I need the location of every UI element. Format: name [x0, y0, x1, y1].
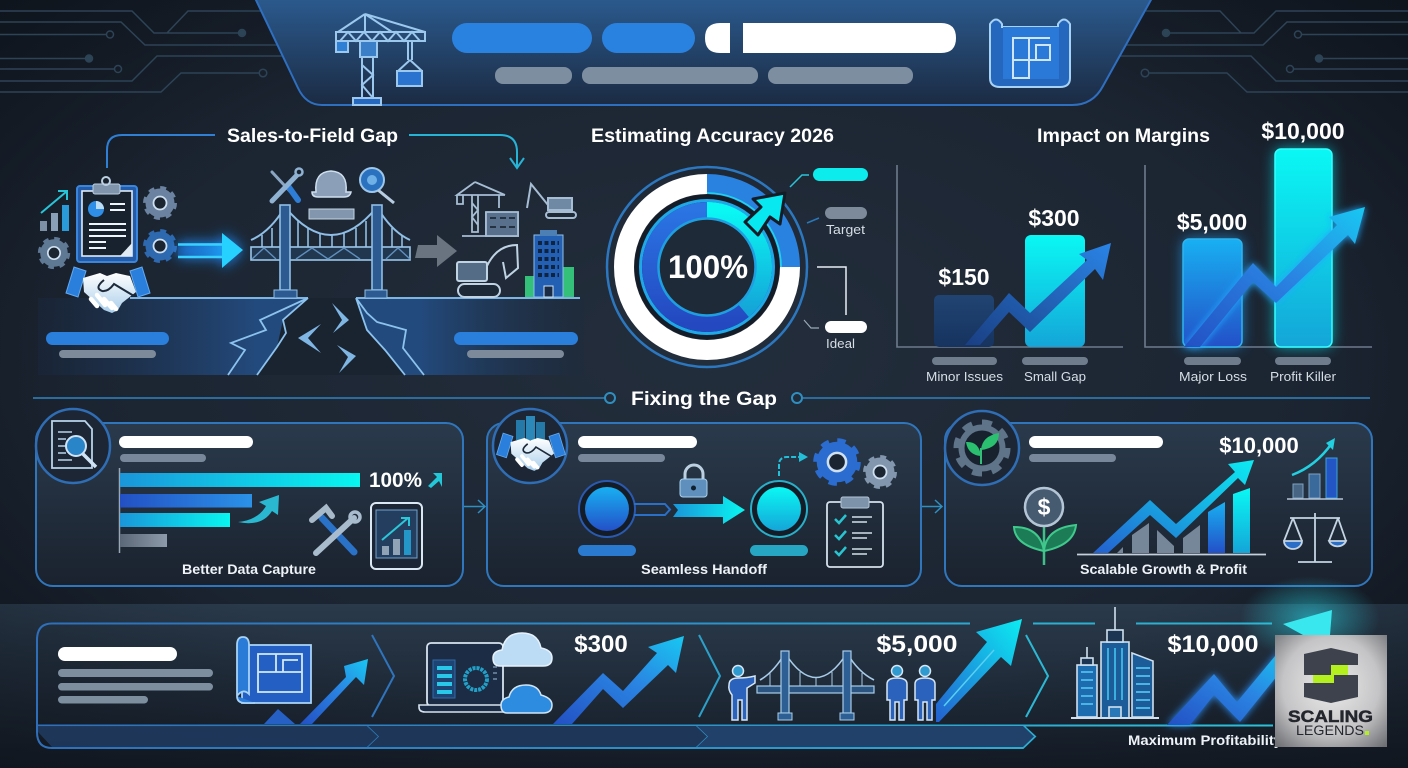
icon: blueprint: [237, 637, 311, 703]
subtitle pill: [1029, 454, 1116, 462]
header title redacted pill: white long: [743, 23, 956, 53]
icon: left gear: [40, 239, 68, 267]
bar chart: large costs: [1145, 118, 1372, 384]
bar chart: small costs: [897, 165, 1123, 384]
title pill: [58, 647, 177, 661]
timeline segment 2: [368, 726, 707, 747]
icon: lock: [680, 465, 707, 497]
logo wordmark: LEGENDS: [1296, 723, 1364, 738]
icon: tower crane: [336, 14, 425, 105]
circuit line decoration right: [1110, 11, 1408, 92]
heading: Fixing the Gap: Fixing the Gap: [631, 389, 777, 410]
heading: Fixing the Gap: [33, 389, 1370, 410]
icon: office building: [525, 230, 574, 297]
arrow: panel 2 to 3: [922, 500, 942, 513]
legend: target: Target: [826, 222, 865, 237]
value: $300: $300: [574, 631, 628, 658]
roadmap timeline bar: [38, 726, 378, 747]
icon: tablet chart: [371, 503, 422, 569]
chevron separators: [372, 635, 1048, 717]
subtitle pill: [578, 454, 665, 462]
bar chart: small costs: Minor Issues: [926, 369, 1004, 384]
header title redacted pill: blue 1: [452, 23, 592, 53]
logo mark: [1304, 648, 1358, 703]
arrow: small up right: [428, 473, 442, 488]
panel: roadmap: [37, 576, 1380, 748]
icon: small bar chart: [40, 191, 69, 231]
icon: bridge and workers: [729, 651, 935, 720]
icon: money plant: [1014, 488, 1076, 565]
header subtitle pills: [495, 67, 913, 84]
icon: small chart: [1287, 438, 1343, 499]
bar chart: large costs: Profit Killer: [1270, 369, 1337, 384]
icon: handshake with buildings: [493, 409, 567, 483]
panel: estimating accuracy: [591, 126, 868, 367]
icon: gear with plant: [945, 411, 1019, 485]
heading: Estimating Accuracy 2026: Estimating Accuracy 2026: [591, 126, 834, 147]
caption: Maximum Profitability: [1128, 732, 1282, 748]
icon: top gear: [146, 188, 174, 218]
icon: hammer and wrench: [312, 508, 360, 553]
icon: document magnifier: [36, 409, 110, 483]
arrow: step 3: [936, 619, 1022, 722]
panel: better data capture: [36, 409, 463, 586]
legend: ideal: [804, 267, 867, 351]
timeline segment 3: [697, 726, 1034, 747]
logo wordmark: SCALING: [1288, 708, 1373, 726]
legend: target: [807, 207, 867, 237]
heading: Sales-to-Field Gap: Sales-to-Field Gap: [227, 126, 398, 147]
icon: tape measure: [360, 168, 394, 203]
icon: blue gear: [146, 232, 174, 260]
bar chart: large costs: $5,000: [1177, 209, 1247, 235]
icon: excavator bottom: [457, 245, 518, 297]
icon: skyscrapers: [1071, 607, 1159, 718]
caption: Better Data Capture: [182, 561, 316, 577]
heading: Impact on Margins: Impact on Margins: [1037, 126, 1210, 147]
header banner: [255, 0, 1152, 105]
title pill: [578, 436, 697, 448]
legend: ideal: Ideal: [826, 336, 855, 351]
caption: Scalable Growth & Profit: [1080, 561, 1247, 577]
bar chart: large costs: Major Loss: [1179, 369, 1248, 384]
bar chart: large costs: $10,000: [1261, 118, 1345, 144]
roadmap frame: [37, 624, 1273, 748]
panel: seamless handoff: [487, 409, 921, 586]
icon: laptop and clouds: [419, 633, 552, 713]
node: field: [751, 481, 807, 537]
icon: clipboard report: [77, 177, 137, 262]
panel: impact on margins: [897, 118, 1372, 384]
text placeholder pills: [58, 669, 213, 704]
icon: blueprint: [990, 20, 1070, 87]
logo: Scaling Legends: [1275, 635, 1387, 747]
value: 100%: 100%: [369, 468, 422, 492]
arrow: glowing blue: [178, 233, 243, 268]
caption: Seamless Handoff: [641, 561, 767, 577]
arrow: handoff: [673, 496, 745, 524]
arrow: step 4: [1167, 576, 1380, 725]
icon: excavator top: [527, 184, 576, 218]
icon: blue gear: [817, 442, 857, 482]
worker 2: [887, 666, 907, 720]
left caption pills: [46, 332, 169, 358]
arrow on donut: [745, 193, 785, 235]
arrow: step 1: [264, 659, 368, 724]
node: sales: [579, 481, 670, 537]
donut value: 100%: [668, 249, 748, 285]
icon: grey gear: [866, 458, 894, 486]
title pill: [119, 436, 253, 448]
chart: growth: [1077, 460, 1266, 554]
panel: sales-to-field gap: [38, 126, 584, 375]
logo wordmark: [1288, 708, 1373, 738]
bar chart: data capture: [120, 468, 360, 553]
arrow: dashed to gears: [779, 452, 808, 476]
worker 3: [915, 666, 935, 720]
bar chart: small costs: Small Gap: [1024, 369, 1086, 384]
arrow: panel 1 to 2: [464, 500, 485, 513]
circuit line decoration left: [0, 11, 298, 92]
icon: handshake: [66, 267, 150, 313]
legend: target pill cyan: [790, 168, 868, 187]
icon: crane and building: [457, 182, 519, 236]
icon: suspension bridge: [251, 205, 410, 298]
icon: money plant: $: [1038, 494, 1051, 520]
arrow: grey: [415, 235, 457, 267]
value: $10,000: $10,000: [1168, 631, 1258, 658]
icon: hard hat: [312, 171, 351, 197]
arrow: step 2: [553, 636, 684, 724]
arrow: curved: [238, 495, 279, 523]
right caption pills: [454, 332, 578, 358]
subtitle pill: [120, 454, 206, 462]
ground with chasm: [38, 298, 584, 375]
donut chart: [607, 167, 807, 367]
worker 1: [729, 666, 755, 720]
bar chart: small costs: $150: [938, 264, 990, 290]
icon: ruler: [309, 209, 354, 219]
connector: left bracket: [107, 135, 215, 168]
title pill: [1029, 436, 1163, 448]
value: $10,000: $10,000: [1219, 433, 1299, 458]
header title redacted pill: white short: [705, 23, 730, 53]
icon: wrench and screwdriver: [272, 168, 302, 201]
value: $5,000: $5,000: [876, 631, 958, 658]
arrow: connector to right: [409, 135, 524, 168]
bottom background band: [0, 604, 1408, 768]
panel: scalable growth: [945, 411, 1372, 586]
header title redacted pill: blue 2: [602, 23, 695, 53]
node caption pills: [578, 545, 808, 556]
icon: checklist: [827, 497, 883, 567]
bar chart: small costs: $300: [1028, 205, 1080, 231]
icon: scales: [1284, 513, 1346, 562]
